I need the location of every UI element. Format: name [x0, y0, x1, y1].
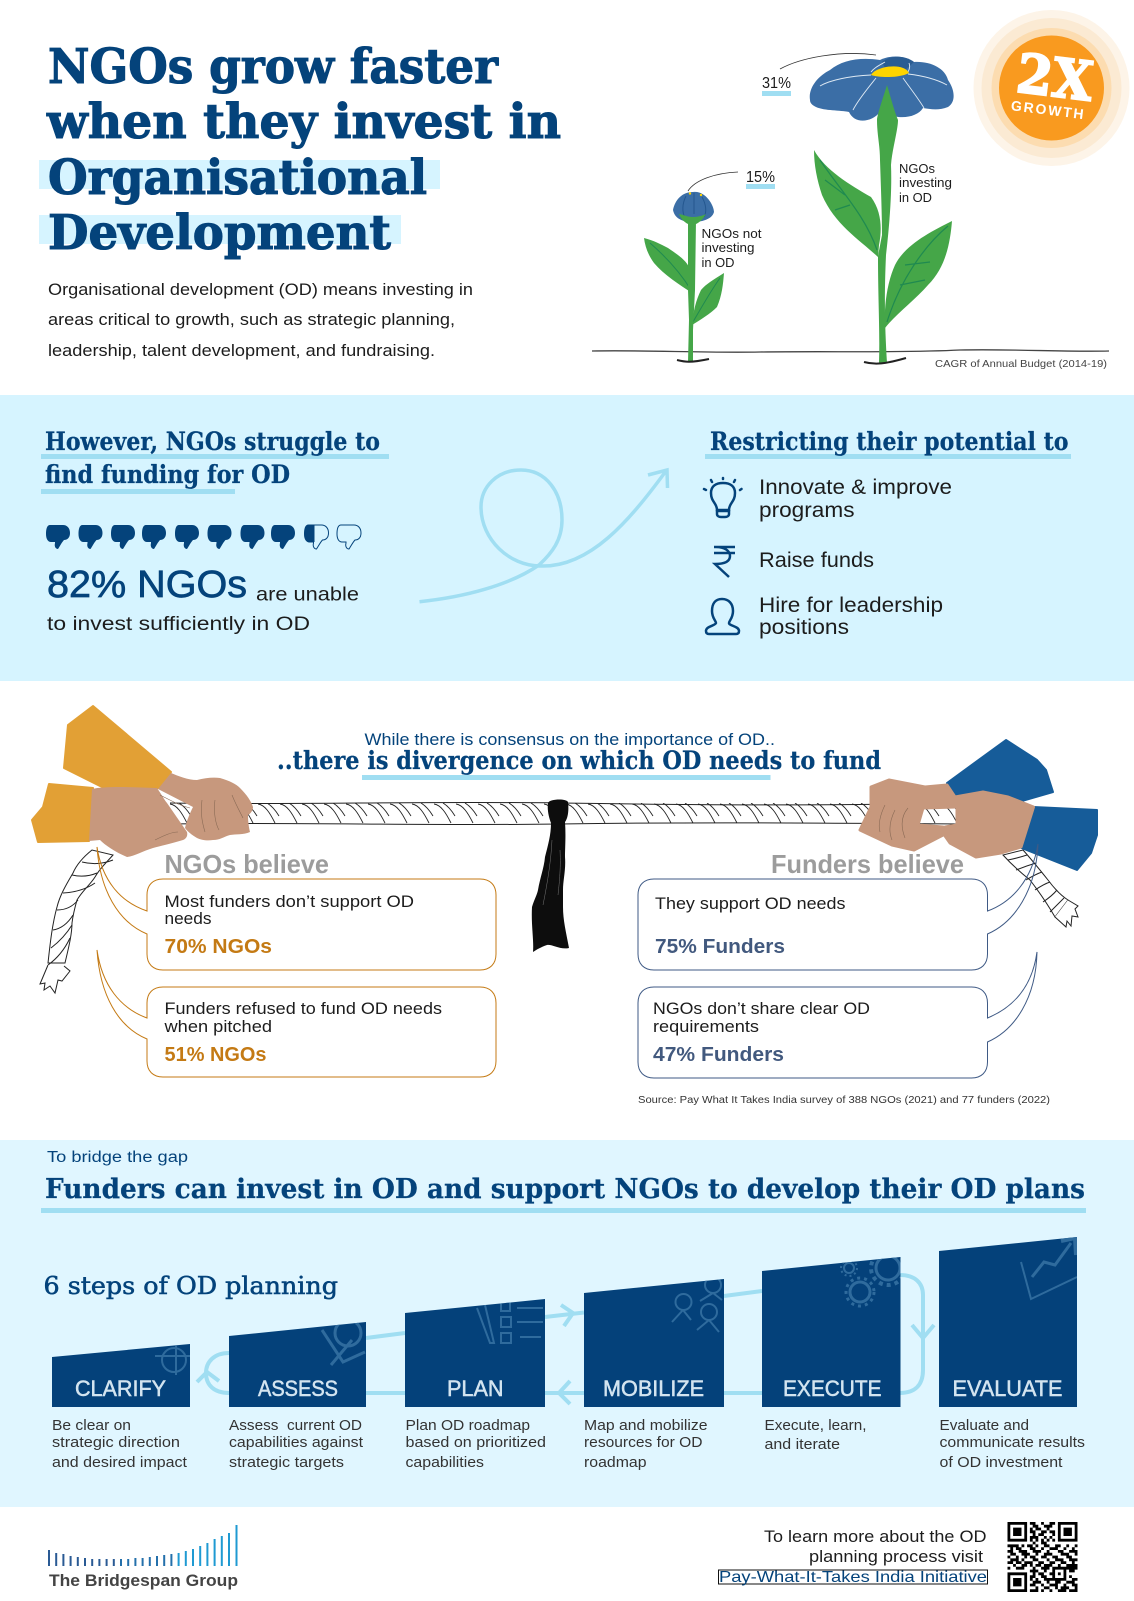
text: evaluate	[940, 1417, 1085, 1471]
label: NGOs not investing in OD: investing	[702, 241, 755, 255]
heading: divergence on OD needs: ..there is divergence on which OD needs to fund	[277, 746, 881, 775]
icons: thumbs down row	[46, 525, 361, 549]
stat: 82% NGOs: are unable	[256, 584, 359, 606]
text: execute: Execute, learn,	[764, 1417, 866, 1434]
stat: 82% NGOs: to invest sufficiently in OD	[47, 613, 310, 635]
callout: they support: They support OD needs	[655, 895, 846, 913]
text: innovate: programs	[759, 499, 854, 522]
badge: 2X growth: GROWTH	[1010, 97, 1085, 122]
text: plan: Plan OD roadmap	[406, 1417, 530, 1434]
text: assess	[229, 1417, 364, 1471]
badge: 2X growth	[974, 10, 1130, 166]
badge: 2X growth: 2X	[1013, 41, 1097, 114]
step: evaluate	[939, 1237, 1077, 1407]
chart caption: CAGR of Annual Budget (2014-19)	[935, 358, 1107, 370]
label: NGOs investing in OD: NGOs	[899, 162, 935, 176]
callout: they support	[638, 844, 1038, 970]
text: assess: Assess current OD	[229, 1417, 362, 1434]
intro text: Organisational development (OD) means investing in	[48, 281, 473, 299]
label: NGOs investing in OD: in OD	[899, 191, 932, 205]
footer call to action: planning process visit	[809, 1547, 983, 1566]
text: hire: positions	[759, 616, 849, 639]
heading: funders can invest: Funders can invest in OD and support NGOs to develop their OD plans	[45, 1173, 1085, 1205]
text: hire	[759, 594, 943, 639]
label: NGOs investing in OD	[899, 162, 952, 205]
text: mobilize: roadmap	[584, 1454, 646, 1471]
step: mobilize	[584, 1277, 724, 1407]
label: NGOs not investing in OD: NGOs not	[702, 227, 762, 241]
icon: rupee	[714, 547, 735, 577]
text: execute	[764, 1417, 866, 1453]
callout: most funders don't support: needs	[164, 910, 212, 928]
step: plan	[405, 1299, 545, 1407]
source note: Source: Pay What It Takes India survey of 388 NGOs (2021) and 77 funders (2022)	[638, 1095, 1050, 1106]
intro text: areas critical to growth, such as strategic planning,	[48, 311, 455, 329]
label: NGOs not investing in OD	[702, 227, 762, 270]
text: execute: and iterate	[764, 1436, 840, 1453]
step: execute: EXECUTE	[783, 1376, 882, 1401]
step: clarify	[52, 1342, 190, 1407]
callout: they support: 75% Funders	[655, 936, 785, 958]
text: clarify: and desired impact	[52, 1454, 188, 1471]
title: when they invest in	[46, 94, 561, 150]
arrow: looping	[420, 470, 668, 602]
heading: Funders believe: Funders believe	[771, 849, 964, 879]
illustration: left hands	[32, 706, 253, 857]
title: Organisational	[48, 150, 427, 206]
callout: 15%	[688, 169, 775, 191]
title: Development	[48, 205, 391, 261]
connectors between steps	[197, 1275, 934, 1404]
callout: NGOs don't share: 47% Funders	[653, 1044, 784, 1066]
title	[39, 39, 561, 261]
text: plan: capabilities	[406, 1454, 484, 1471]
stat: 82% NGOs	[47, 564, 359, 635]
callout: funders refused	[97, 950, 496, 1077]
step: mobilize: MOBILIZE	[603, 1376, 704, 1401]
text: clarify: strategic direction	[52, 1434, 180, 1451]
icon: light bulb	[704, 478, 742, 517]
step: execute	[762, 1251, 905, 1407]
footer call to action: Pay-What-It-Takes India Initiative	[719, 1569, 987, 1586]
label: NGOs not investing in OD: in OD	[702, 256, 734, 270]
heading: NGOs believe: NGOs believe	[164, 849, 329, 879]
text: assess: capabilities against	[229, 1434, 364, 1451]
callout: funders refused: 51% NGOs	[164, 1044, 266, 1066]
illustration: rope	[170, 802, 960, 825]
big flower: NGOs investing in OD	[810, 56, 954, 364]
step: clarify: CLARIFY	[75, 1376, 166, 1401]
step: assess: ASSESS	[258, 1376, 338, 1401]
text: innovate	[759, 476, 952, 522]
text: plan	[406, 1417, 546, 1471]
heading: divergence on OD needs	[277, 731, 881, 780]
heading: divergence on OD needs: While there is consensus on the importance of OD..	[364, 731, 775, 749]
callout: most funders don't support	[97, 847, 496, 970]
illustration: black knot	[532, 799, 569, 952]
callout: NGOs don't share: NGOs don’t share clear OD	[653, 1000, 870, 1018]
text: plan: based on prioritized	[406, 1434, 546, 1451]
text: mobilize: resources for OD	[584, 1434, 703, 1451]
logo: The Bridgespan Group	[49, 1525, 238, 1590]
ground line	[592, 350, 1109, 352]
text: mobilize: Map and mobilize	[584, 1417, 708, 1434]
small flower: NGOs not investing in OD	[644, 192, 724, 362]
heading: NGOs struggle to find funding	[41, 427, 389, 494]
callout: 31%: 31%	[762, 75, 791, 92]
text: innovate: Innovate & improve	[759, 476, 952, 499]
text: evaluate: Evaluate and	[940, 1417, 1029, 1434]
step: assess	[229, 1320, 366, 1407]
callout: NGOs don't share: requirements	[653, 1018, 759, 1036]
illustration: left hanging rope	[40, 850, 113, 993]
stat: 82% NGOs: 82% NGOs	[47, 564, 247, 606]
text: hire: Hire for leadership	[759, 594, 943, 617]
illustration: right hands	[860, 740, 1097, 870]
footer call to action: To learn more about the OD	[764, 1527, 986, 1546]
callout: 31%	[762, 53, 876, 96]
callout: most funders don't support: Most funders don’t support OD	[164, 893, 414, 911]
callout: funders refused: Funders refused to fund OD needs	[164, 1000, 442, 1018]
icon: person	[706, 599, 739, 634]
logo: The Bridgespan Group: The Bridgespan Group	[49, 1571, 238, 1590]
intro text: leadership, talent development, and fundraising.	[48, 342, 435, 360]
intro text	[48, 281, 473, 360]
callout: NGOs don't share	[638, 952, 1037, 1078]
label: NGOs investing in OD: investing	[899, 176, 952, 190]
callout: funders refused: when pitched	[163, 1018, 272, 1036]
heading: NGOs struggle to find funding: find funding for OD	[45, 460, 290, 489]
text: evaluate: of OD investment	[940, 1454, 1063, 1471]
heading: funders can invest: To bridge the gap	[47, 1149, 188, 1166]
heading: NGOs struggle to find funding: However, NGOs struggle to	[45, 427, 380, 456]
callout: 15%: 15%	[746, 169, 775, 186]
panel: funding struggle	[0, 395, 1134, 681]
heading: funders can invest	[41, 1149, 1086, 1213]
illustration: right hanging rope	[1003, 850, 1078, 927]
text: mobilize	[584, 1417, 708, 1471]
QR code	[1008, 1523, 1078, 1591]
subheading: 6 steps: 6 steps of OD planning	[44, 1272, 338, 1300]
step: evaluate: EVALUATE	[952, 1376, 1062, 1401]
text: clarify: Be clear on	[52, 1417, 131, 1434]
title: NGOs grow faster	[48, 39, 499, 95]
heading: restricting potential: Restricting their potential to	[710, 427, 1068, 456]
panel: bridging the gap	[0, 1140, 1134, 1507]
text: evaluate: communicate results	[940, 1434, 1085, 1451]
callout: most funders don't support: 70% NGOs	[164, 936, 272, 958]
step: plan: PLAN	[447, 1376, 504, 1401]
text: clarify	[52, 1417, 188, 1471]
footer call to action	[718, 1527, 988, 1586]
text: raise funds: Raise funds	[759, 549, 874, 572]
text: assess: strategic targets	[229, 1454, 344, 1471]
